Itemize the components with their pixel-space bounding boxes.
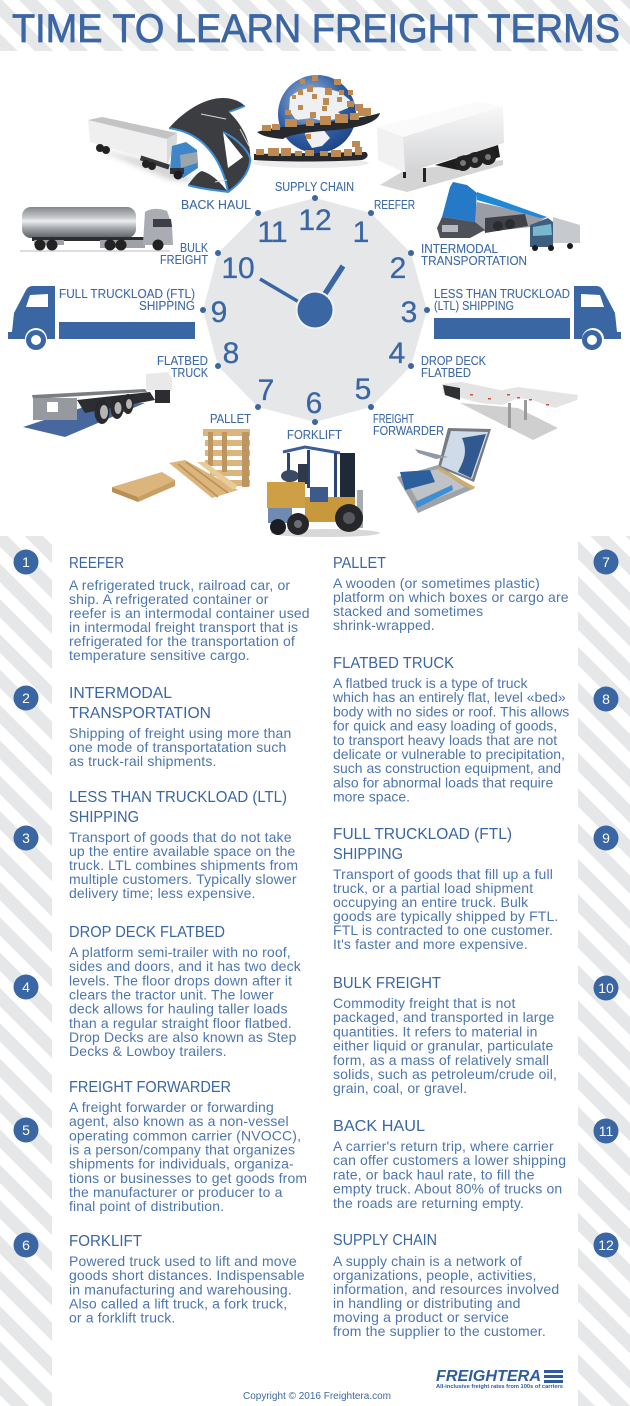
term: full truckload: Transport of goods that fill up a full [333,866,553,882]
term: supply chain: A supply chain is a network of [333,1253,522,1269]
icon: back haul truck on road [88,98,250,192]
term: drop deck flatbed: sides and doors, and it has two deck [69,958,302,974]
term: drop deck flatbed: levels. The floor drops down after it [69,972,292,988]
number badges: 3 [22,830,30,846]
term: flatbed truck: A flatbed truck is a type of truck [333,675,528,691]
term: full truckload [333,826,558,952]
term: freight forwarder: tions or businesses to get goods from [69,1170,307,1186]
term: freight forwarder: is a person/company that organizes [69,1141,295,1157]
term: bulk freight: solids, such as petroleum/crude oil, [333,1066,557,1082]
term: less than truckload: SHIPPING [69,809,139,826]
term: back haul: empty truck. About 80% of trucks on [333,1181,562,1197]
clock numerals: 1 [353,216,369,249]
term: freight forwarder: A freight forwarder or forwarding [69,1099,274,1115]
term: forklift [69,1233,305,1326]
term: reefer: temperature sensitive cargo. [69,647,250,663]
term: less than truckload: delivery time; less expensive. [69,885,256,901]
term: drop deck flatbed: Decks & Lowboy trailers. [69,1043,227,1059]
term: bulk freight: Commodity freight that is not [333,995,516,1011]
clock hands [260,266,343,330]
right stripe column [578,536,630,1406]
clock labels: BACK HAUL [181,198,251,212]
term: forklift: goods short distances. Indispensable [69,1267,305,1283]
clock numerals: 2 [390,252,406,285]
term: bulk freight: form, as a mass of relatively small [333,1052,549,1068]
term: bulk freight: packaged, and transported in large [333,1009,555,1025]
term: supply chain: information, and resources involved [333,1281,559,1297]
term: flatbed truck: such as construction equipment, and [333,760,561,776]
icon: pallets [112,429,250,502]
term: freight forwarder: agent, also known as a non-vessel [69,1113,289,1129]
term: full truckload: SHIPPING [333,846,403,863]
term: less than truckload: LESS THAN TRUCKLOAD (LTL) [69,789,287,806]
term: flatbed truck: more space. [333,789,410,805]
clock labels: INTERMODAL [421,242,498,256]
term: bulk freight: grain, coal, or gravel. [333,1080,467,1096]
term: flatbed truck: also for abnormal loads that require [333,774,553,790]
term: freight forwarder [69,1079,307,1214]
header band [0,0,630,51]
term: intermodal transportation [69,685,291,769]
term: intermodal transportation: TRANSPORTATION [69,705,211,722]
term: bulk freight [333,975,557,1096]
term: forklift: or a forklift truck. [69,1310,175,1326]
clock numerals: 8 [223,337,239,370]
term: flatbed truck: body with no sides or roof. This allows [333,703,569,719]
icon: supply chain globe [253,75,380,168]
term: back haul: A carrier's return trip, where carrier [333,1138,554,1154]
term: freight forwarder: the manufacturer or producer to a [69,1184,283,1200]
term: flatbed truck: to transport heavy loads that are not [333,732,557,748]
term: full truckload: goods are typically shipped by FTL. [333,908,558,924]
term: back haul: the roads are returning empty. [333,1195,524,1211]
term: intermodal transportation: as truck-rail shipments. [69,753,217,769]
clock numerals: 5 [355,373,371,406]
clock labels: TRANSPORTATION [421,254,527,268]
term: reefer: REEFER [69,555,124,572]
term: pallet: stacked and sometimes [333,603,483,619]
number badges: 12 [598,1237,614,1253]
term: drop deck flatbed: DROP DECK FLATBED [69,924,225,941]
copyright: Copyright © 2016 Freightera.com [243,1391,391,1402]
term: intermodal transportation: Shipping of freight using more than [69,725,291,741]
term: back haul: rate, or back haul rate, to fill the [333,1166,535,1182]
term: flatbed truck: FLATBED TRUCK [333,655,454,672]
clock numerals: 12 [298,204,332,237]
clock labels: (LTL) SHIPPING [434,299,514,313]
clock labels: PALLET [210,412,251,426]
term: freight forwarder: operating common carrier (NVOCC), [69,1127,301,1143]
clock labels: BULK [180,241,209,255]
term: back haul: BACK HAUL [333,1118,425,1135]
clock labels: FLATBED [421,366,471,380]
term: drop deck flatbed: deck allows for hauling taller loads [69,1001,288,1017]
clock labels: FREIGHT [373,412,414,426]
term: supply chain: moving a product or service [333,1309,509,1325]
term: supply chain: in handling or distributing and [333,1295,521,1311]
clock numerals [211,204,417,420]
number badges: 2 [22,690,30,706]
term: full truckload: occupying an entire truck. Bulk [333,894,529,910]
term: drop deck flatbed [69,924,302,1059]
icon: intermodal train and truck [437,182,580,251]
clock labels: TRUCK [171,366,209,380]
left stripe column [0,536,52,1406]
term: flatbed truck: which has an entirely flat, level «bed» [332,689,566,705]
logo: Freightera: All-inclusive freight rates from 100s of carriers [436,1384,563,1390]
clock labels: DROP DECK [421,354,487,368]
term: forklift: FORKLIFT [69,1233,142,1250]
term: drop deck flatbed: than a regular straight floor flatbed. [69,1015,292,1031]
icon: forklift [267,447,380,537]
term: bulk freight: quantities. It refers to material in [333,1023,538,1039]
term: less than truckload: multiple customers. Typically slower [69,871,297,887]
clock labels: SHIPPING [139,299,195,313]
number badges: 6 [22,1237,30,1253]
icon: flatbed truck [23,372,172,437]
clock labels: SUPPLY CHAIN [275,180,354,194]
term: less than truckload: Transport of goods that do not take [69,829,292,845]
term: forklift: Also called a lift truck, a fork truck, [69,1295,287,1311]
clock labels: LESS THAN TRUCKLOAD [434,287,570,301]
term: flatbed truck: for quick and easy loading of goods, [333,718,557,734]
clock numerals: 3 [401,296,417,329]
logo: Freightera: FREIGHTERA [436,1368,541,1385]
term: freight forwarder: final point of distribution. [69,1198,224,1214]
clock labels: FORWARDER [373,424,444,438]
icon: full truckload truck [8,286,195,350]
clock numerals: 9 [211,296,227,329]
term: pallet: PALLET [333,555,386,572]
term: intermodal transportation: one mode of transportatation such [69,739,286,755]
term: forklift: in manufacturing and warehousing. [69,1281,292,1297]
term: forklift: Powered truck used to lift and move [69,1253,297,1269]
number badges: 1 [22,554,30,570]
clock labels: FLATBED [157,354,208,368]
term: supply chain: SUPPLY CHAIN [333,1232,437,1249]
clock numerals: 4 [389,337,405,370]
term: freight forwarder: FREIGHT FORWARDER [69,1079,231,1096]
term: supply chain: organizations, people, activities, [333,1267,537,1283]
clock numerals: 10 [221,252,255,285]
term: reefer: A refrigerated truck, railroad car, or [69,577,290,593]
term: reefer: refrigerated for the transportation of [69,633,295,649]
term: bulk freight: BULK FREIGHT [333,975,441,992]
term: full truckload: truck, or a partial load shipment [333,880,533,896]
term: less than truckload: up the entire available space on the [69,843,296,859]
term: drop deck flatbed: clears the tractor unit. The lower [69,986,274,1002]
term: pallet: A wooden (or sometimes plastic) [333,575,540,591]
term: full truckload: It's faster and more expensive. [333,936,528,952]
clock numerals: 6 [306,387,322,420]
clock numerals: 11 [257,216,287,249]
term: full truckload: FULL TRUCKLOAD (FTL) [333,826,512,843]
term: intermodal transportation: INTERMODAL [69,685,172,702]
number badges [14,550,618,1258]
logo: Freightera [436,1368,563,1390]
number badges: 5 [22,1122,30,1138]
icon: less than truckload truck [434,286,621,350]
term: less than truckload: truck. LTL combines shipments from [69,857,298,873]
term: freight forwarder: shipments for individuals, organiza- [69,1156,294,1172]
term: drop deck flatbed: A platform semi-trailer with no roof, [69,944,291,960]
icon: bulk tanker truck [20,207,173,252]
term: back haul [333,1118,566,1211]
term: pallet [333,555,569,633]
number badges: 11 [599,1123,613,1139]
clock numerals: 7 [258,374,274,407]
number badges: 8 [602,691,610,707]
term: less than truckload [69,789,298,901]
clock labels: FREIGHT [160,253,208,267]
term: flatbed truck: delicate or vulnerable to precipitation, [333,746,565,762]
term: reefer: reefer is an intermodal container used [69,605,310,621]
term: back haul: can offer customers a lower shipping [333,1152,566,1168]
clock labels [59,180,570,442]
icon: drop deck flatbed [442,382,578,440]
term: full truckload: FTL is contracted to one customer. [333,922,553,938]
number badges: 9 [602,830,610,846]
term: flatbed truck [332,655,569,805]
icon: freight forwarder laptop [397,428,491,513]
icon: reefer trailer [377,102,504,192]
term: drop deck flatbed: Drop Decks are also known as Step [69,1029,297,1045]
term: reefer [69,555,310,663]
clock labels: REEFER [374,198,415,212]
clock dots [200,195,430,425]
number badges: 7 [602,554,610,570]
term: reefer: in intermodal freight transport that is [69,619,298,635]
number badges: 4 [22,979,30,995]
clock face [200,195,430,425]
term: reefer: ship. A refrigerated container or [69,591,269,607]
term: pallet: platform on which boxes or cargo are [333,589,569,605]
term: pallet: shrink-wrapped. [333,617,435,633]
clock labels: FORKLIFT [287,428,342,442]
term: supply chain: from the supplier to the customer. [333,1323,546,1339]
clock labels: FULL TRUCKLOAD (FTL) [59,287,195,301]
term: bulk freight: either liquid or granular, particulate [333,1038,554,1054]
number badges: 10 [598,980,614,996]
term: supply chain [333,1232,559,1339]
